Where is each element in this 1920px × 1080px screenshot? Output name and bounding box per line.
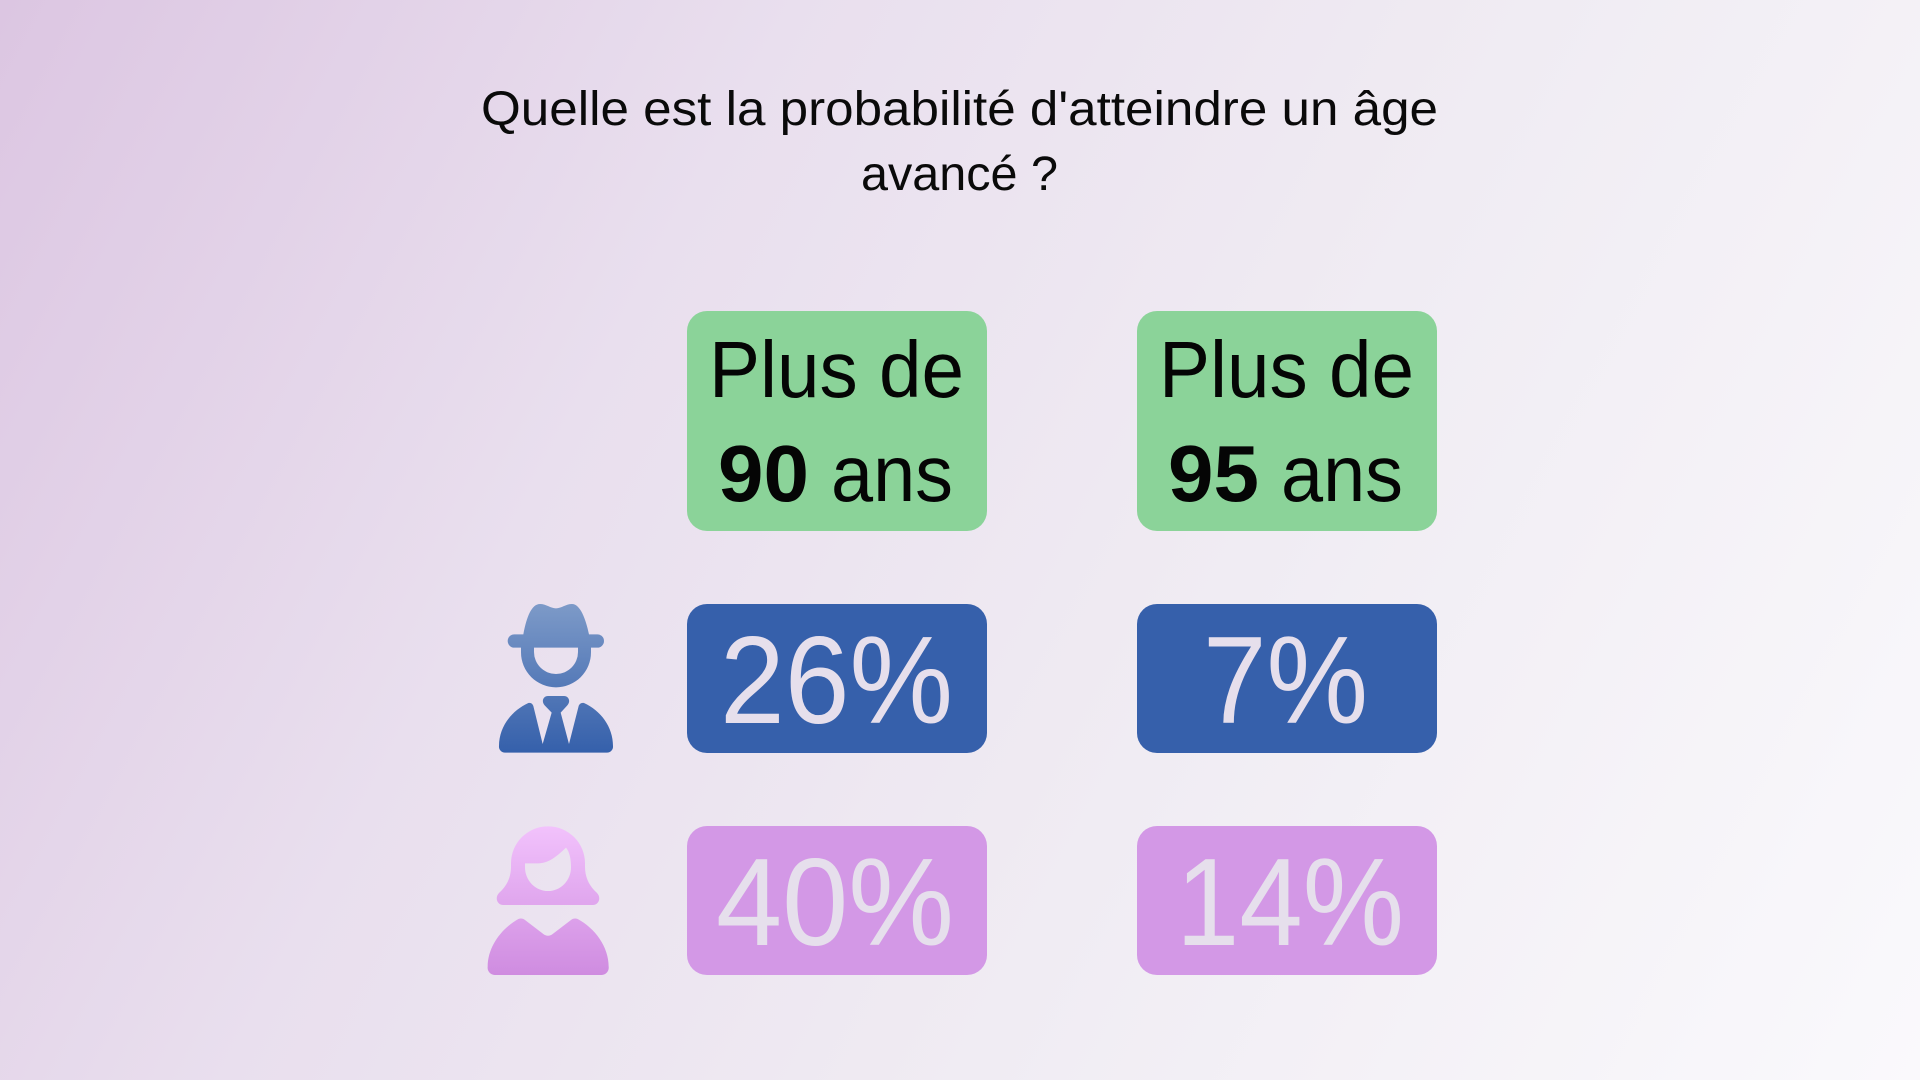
title: Quelle est la probabilité d'atteindre un âge [481, 83, 1438, 136]
header: plus de 90 ans: Plus de [709, 325, 964, 414]
woman 95 value: 14%: 14% [1176, 834, 1404, 972]
title [481, 83, 1438, 201]
title: avancé ? [861, 148, 1058, 201]
icon: woman [488, 826, 609, 975]
man 95 value: 7% [1137, 604, 1437, 753]
header: plus de 95 ans: 95 [1168, 429, 1259, 518]
header: plus de 95 ans [1137, 311, 1437, 531]
man 90 value: 26%: 26% [720, 612, 953, 750]
woman 90 value: 40%: 40% [716, 834, 954, 972]
header: plus de 95 ans: Plus de [1159, 325, 1414, 414]
header: plus de 90 ans: ans [831, 429, 953, 518]
header: plus de 90 ans: 90 [718, 429, 809, 518]
header: plus de 95 ans: ans [1281, 429, 1403, 518]
icon: man with hat [499, 604, 613, 753]
header: plus de 90 ans [687, 311, 987, 531]
man 95 value: 7%: 7% [1203, 612, 1368, 750]
